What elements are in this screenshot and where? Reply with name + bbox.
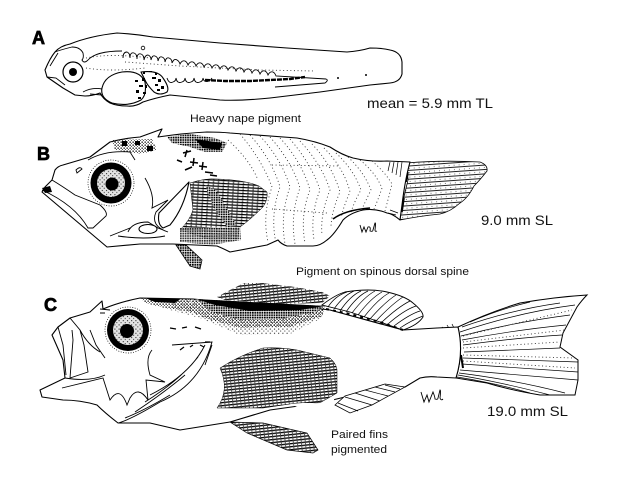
label: C: C — [44, 295, 57, 315]
tail base rays B — [388, 162, 402, 215]
caudal rays C — [457, 302, 578, 395]
soft dorsal rays C — [328, 291, 423, 328]
head pigment B — [112, 139, 157, 154]
caption: C length: 19.0 mm SL — [487, 403, 568, 419]
caption: paired fins pigmented: Paired fins — [331, 429, 389, 441]
eye C — [105, 307, 151, 353]
caption: mean length: mean = 5.9 mm TL — [367, 95, 493, 111]
larva myomeres — [123, 52, 327, 87]
fin clear gap C — [290, 395, 347, 413]
nape pigment band B — [167, 134, 227, 176]
label: B: B — [37, 144, 50, 164]
caption: paired fins pigmented: pigmented — [331, 444, 387, 456]
dorsal pigment band C — [140, 298, 325, 335]
larva gut pigment — [135, 71, 164, 99]
ventral fin B — [176, 245, 202, 269]
fish B: preflexion juvenile — [42, 129, 487, 269]
spinous dorsal fin C — [217, 283, 330, 304]
caption: spinous dorsal pigment: Pigment on spinous dorsal spine — [296, 266, 469, 278]
artist signature B — [360, 223, 377, 232]
body myomere stipple B — [228, 134, 392, 244]
larva yolk sac — [102, 72, 146, 104]
larva ventral pigment line — [205, 77, 305, 81]
opercle and branchiostegal C — [62, 342, 212, 423]
pectoral fin base stipple B — [180, 227, 241, 245]
caption: heavy nape pigment: Heavy nape pigment — [190, 113, 301, 125]
head flecks C — [170, 327, 210, 350]
body outline C — [40, 298, 461, 430]
caption: paired fins pigmented — [331, 429, 389, 456]
ventral fin C — [230, 422, 318, 453]
label: A: A — [32, 28, 45, 48]
larva body outline — [45, 33, 402, 106]
body outline B — [42, 129, 410, 252]
operculum B — [110, 178, 189, 238]
pectoral fin C — [217, 348, 337, 408]
eye B — [88, 160, 134, 206]
fish A: larva — [45, 33, 402, 106]
anal fin C — [335, 384, 405, 413]
dorsal fin spots C — [326, 309, 403, 330]
pectoral fin B — [180, 179, 267, 240]
jaws B — [42, 152, 135, 228]
larva eye — [63, 62, 83, 82]
larva head and gut detail — [47, 47, 150, 95]
jaws C — [58, 309, 110, 378]
fin dark band B — [205, 185, 236, 228]
fish C: larger juvenile — [40, 283, 587, 453]
ventral edge pigment B — [333, 208, 370, 219]
caption: B length: 9.0 mm SL — [481, 212, 553, 228]
tail peduncle rays C — [442, 324, 456, 378]
artist signature C — [421, 390, 443, 402]
caudal fin C — [456, 295, 587, 395]
larva gut lobe — [141, 72, 168, 94]
larva small marks — [141, 46, 367, 79]
soft dorsal fin C — [322, 290, 423, 330]
tail fin B — [400, 161, 487, 220]
